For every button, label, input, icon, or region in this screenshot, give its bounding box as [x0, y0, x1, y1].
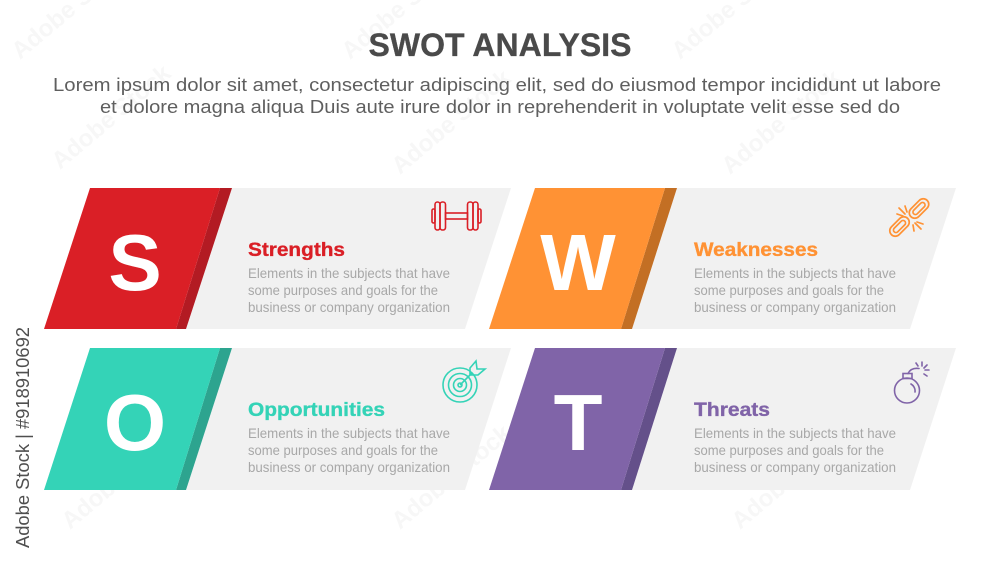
panel: weaknesses: business or company organization — [694, 299, 896, 315]
SWOT infographic: Adobe Stock — [47, 59, 177, 175]
panel: weaknesses: Elements in the subjects that have — [694, 265, 896, 281]
SWOT infographic: Adobe Stock — [717, 64, 847, 180]
icon: broken chain — [887, 196, 931, 239]
subtitle text: Lorem ipsum dolor sit amet, consectetur adipiscing elit, sed do eiusmod tempor incididunt ut labore — [53, 75, 941, 95]
panel: opportunities: Opportunities — [248, 399, 385, 421]
watermark credit: Adobe Stock | #918910692 — [12, 327, 33, 548]
subtitle text: et dolore magna aliqua Duis aute irure dolor in reprehenderit in voluptate velit esse sed do — [100, 97, 900, 117]
panel: strengths: S — [108, 218, 162, 307]
panel: strengths: Strengths — [248, 239, 345, 261]
panel: threats: T — [554, 378, 603, 467]
panel: opportunities: O — [104, 378, 166, 467]
panel: strengths — [44, 188, 511, 329]
panel: opportunities: Elements in the subjects that have — [248, 425, 450, 441]
panel: threats: business or company organization — [694, 459, 896, 475]
panel: strengths: Elements in the subjects that have — [248, 265, 450, 281]
SWOT infographic: Adobe Stock — [387, 64, 517, 180]
icon: dumbbell — [432, 202, 481, 230]
SWOT infographic: Adobe Stock — [727, 419, 857, 535]
panel: weaknesses — [489, 188, 956, 329]
panel: strengths: business or company organization — [248, 299, 450, 315]
panel: threats — [489, 348, 956, 490]
panel: weaknesses: some purposes and goals for the — [694, 282, 884, 298]
panel: threats: Threats — [694, 399, 770, 421]
SWOT infographic: Adobe Stock — [387, 419, 517, 535]
panel: threats: Elements in the subjects that have — [694, 425, 896, 441]
icon: target — [443, 361, 485, 402]
icon: bomb — [894, 362, 929, 403]
SWOT infographic: Adobe Stock — [57, 419, 187, 535]
panel: opportunities: business or company organization — [248, 459, 450, 475]
title: SWOT ANALYSIS — [368, 27, 632, 63]
panel: strengths: some purposes and goals for the — [248, 282, 438, 298]
panel: threats: some purposes and goals for the — [694, 442, 884, 458]
panel: weaknesses: Weaknesses — [694, 239, 818, 261]
panel: opportunities — [44, 348, 511, 490]
panel: weaknesses: W — [540, 218, 616, 307]
panel: opportunities: some purposes and goals for the — [248, 442, 438, 458]
subtitle text — [53, 75, 941, 117]
